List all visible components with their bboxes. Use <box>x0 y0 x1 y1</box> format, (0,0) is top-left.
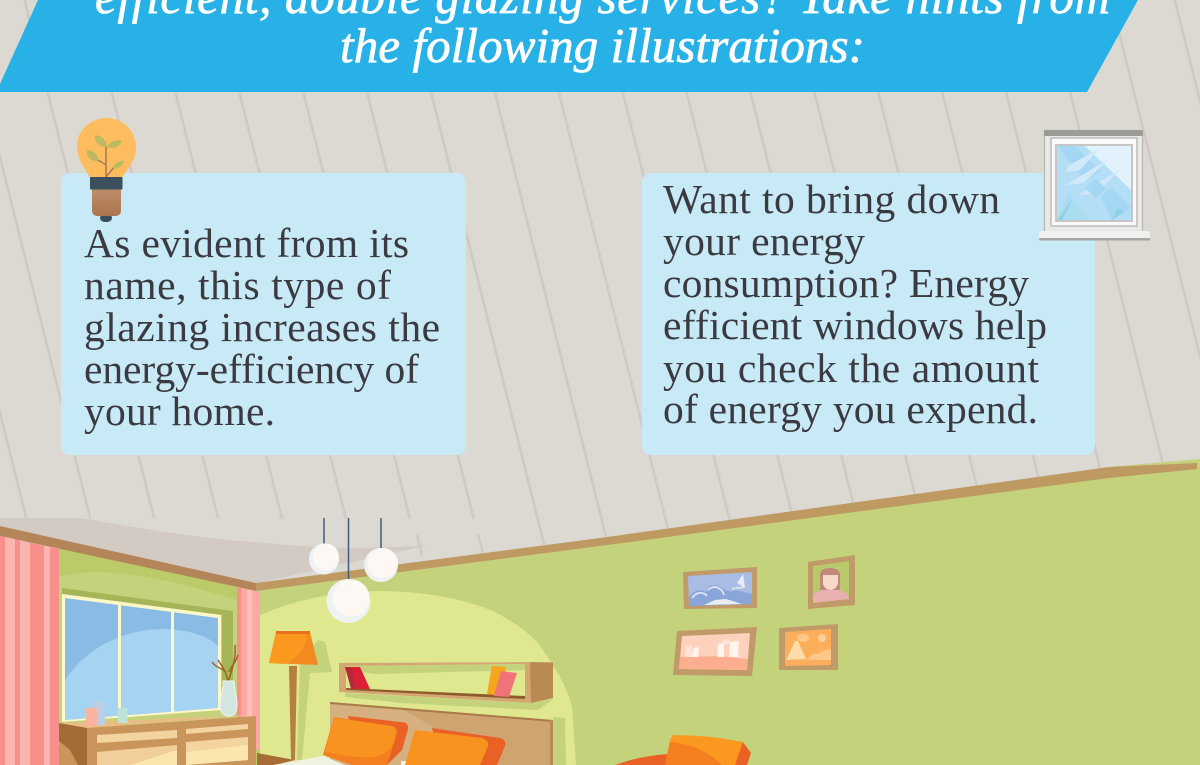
floor lamp <box>269 631 318 760</box>
text block: windows description: efficient windows help <box>663 302 1047 348</box>
pillow right <box>405 728 505 765</box>
floor strip <box>257 753 295 765</box>
icon: window <box>1039 130 1150 240</box>
ceiling alcove shadow <box>0 518 429 583</box>
title banner <box>0 0 1138 92</box>
wall light arc <box>260 591 576 765</box>
text block: glazing description <box>84 220 440 434</box>
bed sheet <box>273 756 345 765</box>
text block: glazing description: your home. <box>84 388 275 434</box>
text block: windows description: of energy you expend. <box>663 386 1038 432</box>
text block: windows description <box>663 176 1047 432</box>
text block: windows description: you check the amount <box>663 345 1039 391</box>
armchair <box>615 735 751 765</box>
dresser <box>59 715 256 765</box>
headboard and shelf shadows <box>345 693 553 710</box>
text block: glazing description: energy-efficiency of <box>84 346 419 392</box>
ceiling beam right <box>256 463 1197 591</box>
icon: eco light bulb <box>77 118 136 222</box>
window reveal <box>62 588 233 710</box>
window <box>62 594 222 722</box>
left wall <box>59 540 260 765</box>
text block: windows description: your energy <box>663 218 865 264</box>
curtain right <box>237 587 260 750</box>
candles <box>86 702 128 727</box>
right wall <box>256 459 1200 765</box>
text block: windows description: Want to bring down <box>663 176 1000 222</box>
vase with branches <box>212 645 238 716</box>
picture: portrait <box>808 555 855 609</box>
title text: the following illustrations: <box>340 18 865 73</box>
panel: energy-efficiency glazing <box>61 173 466 455</box>
illustration: bedroom <box>0 459 1200 765</box>
text block: glazing description: glazing increases the <box>84 304 440 350</box>
picture: sea waves <box>683 567 757 609</box>
pillow left <box>323 716 408 765</box>
text block: glazing description: name, this type of <box>84 262 391 308</box>
headboard <box>330 702 553 765</box>
curtain left <box>0 536 59 765</box>
text block: glazing description: As evident from its <box>84 220 409 266</box>
wall shelf <box>339 662 553 703</box>
ceiling beam left <box>0 526 256 591</box>
picture: landscape <box>779 624 838 670</box>
title text <box>95 0 1110 73</box>
picture: city skyline <box>673 627 757 676</box>
pendant lights <box>309 518 398 623</box>
text block: windows description: consumption? Energy <box>663 260 1029 306</box>
panel: energy-efficient windows <box>642 173 1095 455</box>
